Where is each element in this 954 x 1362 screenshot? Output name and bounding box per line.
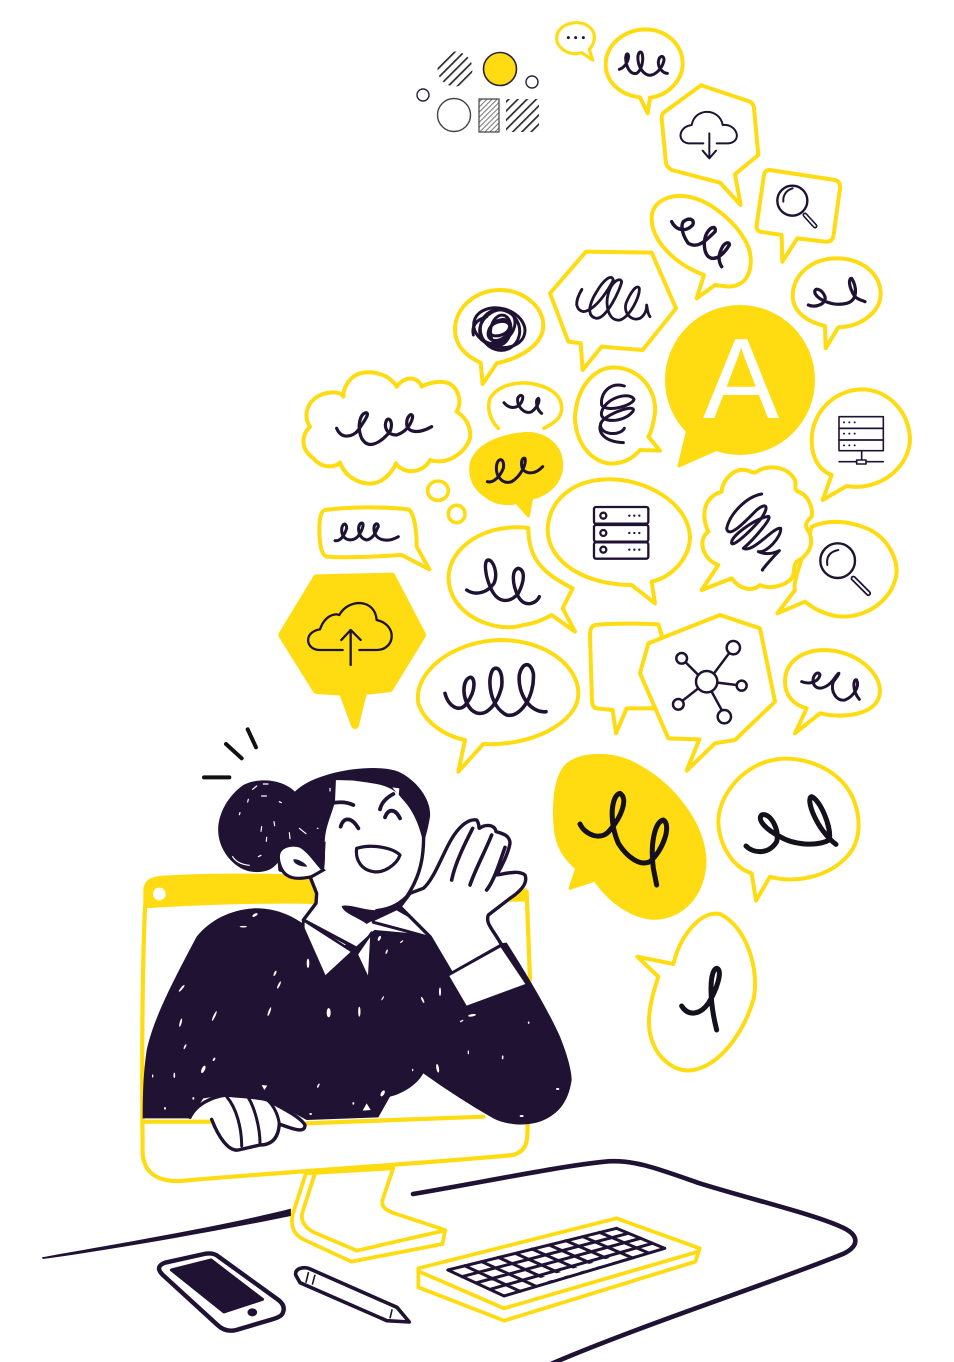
ear bbox=[278, 845, 323, 878]
bubble: spring scribble bbox=[575, 367, 660, 464]
pen bbox=[296, 1268, 409, 1322]
bubble: squiggle upper bbox=[652, 196, 751, 298]
raised hand bbox=[400, 820, 526, 973]
bubble: squiggle right lower bbox=[785, 650, 880, 733]
face and neck bbox=[278, 778, 430, 948]
bubble: network bbox=[640, 615, 775, 771]
bubble: yellow hexagon upload bbox=[282, 577, 422, 725]
bubble: empty rectangle bbox=[590, 624, 662, 733]
bubble: cloud download bbox=[662, 85, 758, 205]
shadow under chin bbox=[342, 905, 403, 924]
lower hand bbox=[190, 1095, 305, 1150]
monitor title bar bbox=[143, 874, 529, 908]
sweater speckles bbox=[152, 912, 559, 1117]
keyboard bbox=[418, 1218, 700, 1321]
hair highlights bbox=[233, 784, 330, 865]
bubble: center-left squiggle bbox=[449, 527, 575, 632]
computer monitor stand bbox=[292, 1168, 445, 1262]
bubble: server right bbox=[812, 389, 910, 500]
phone bbox=[159, 1253, 284, 1331]
bubble: magnifier small bbox=[757, 170, 840, 262]
bubble: yellow squiggle bbox=[554, 755, 705, 918]
bubble: server center bbox=[548, 479, 690, 603]
bubble: large squiggle bbox=[418, 640, 578, 772]
bubble: thick squiggle bbox=[718, 759, 859, 901]
bubble: yellow small squiggle bbox=[471, 433, 562, 516]
decorative shape cluster bbox=[417, 52, 539, 132]
bubble: rounded rectangle squiggle bbox=[319, 507, 429, 569]
hair bbox=[218, 768, 430, 878]
bubble: yellow letter A: A bbox=[703, 316, 779, 443]
shirt cuff bbox=[449, 947, 525, 1006]
torso bbox=[143, 908, 572, 1125]
bubble: magnifier large bbox=[777, 522, 897, 617]
collar bbox=[303, 909, 429, 981]
desk outline bbox=[42, 1161, 855, 1362]
bubble: wavy spring bbox=[702, 467, 812, 590]
monitor frame bbox=[142, 890, 530, 1181]
person and monitor bbox=[142, 729, 572, 1181]
sideburn bbox=[305, 842, 326, 871]
bubble: typing dots bbox=[557, 23, 594, 60]
bubble: squiggle top bbox=[606, 29, 683, 113]
bubble: yellow letter A bbox=[665, 305, 815, 466]
bubble: small open squiggle bbox=[489, 383, 562, 428]
bubble: hexagon squiggle bbox=[550, 252, 676, 370]
excitement marks bbox=[204, 729, 256, 777]
bubble: single squiggle bbox=[637, 914, 755, 1070]
bubble: thought cloud bbox=[303, 372, 470, 523]
facial features bbox=[335, 794, 400, 872]
bubble: squiggle right bbox=[793, 258, 881, 348]
bubble: tangled scribble bbox=[455, 290, 543, 384]
